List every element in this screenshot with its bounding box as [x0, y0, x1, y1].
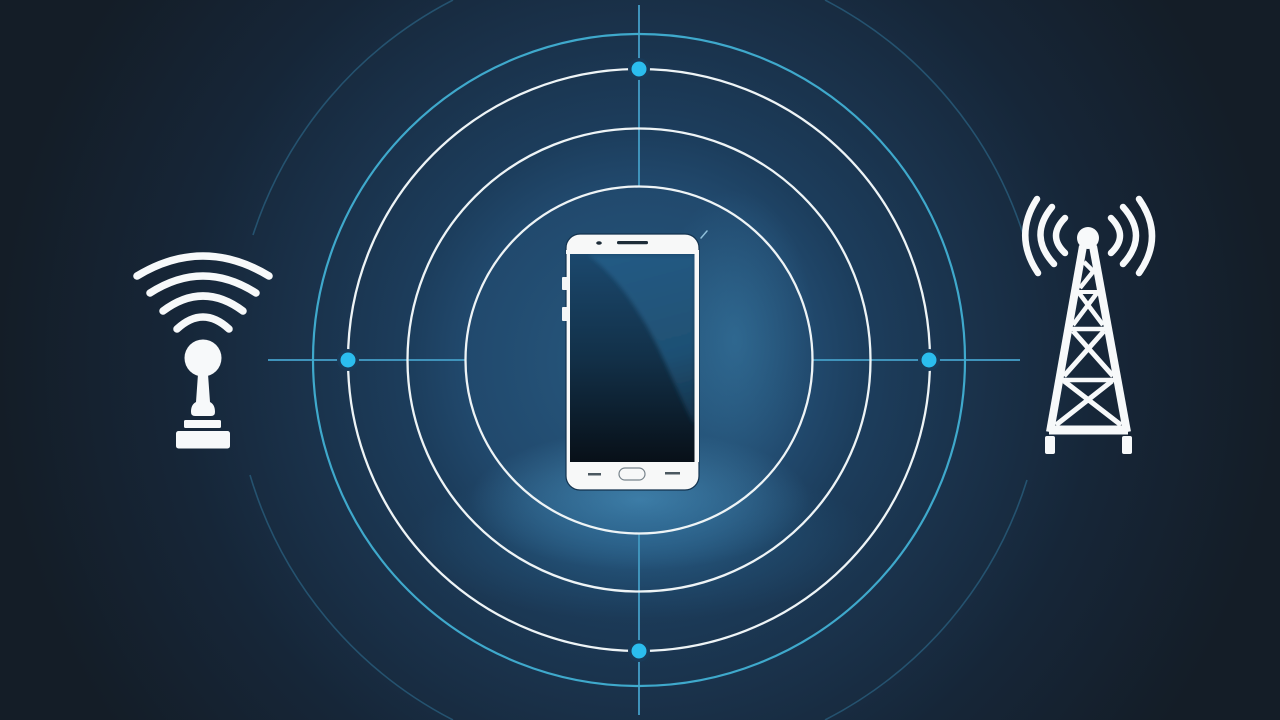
tower ball: [1077, 227, 1099, 249]
wide glow below the inner ring: [400, 460, 880, 630]
home and nav buttons: [588, 468, 680, 480]
tower signal arcs: [1025, 199, 1152, 273]
ring node dots: [337, 58, 940, 662]
screen edge cover: [566, 250, 699, 462]
screen reflection: [588, 255, 694, 425]
icon: wifi antenna: [137, 256, 269, 448]
glow beneath phone: [450, 420, 830, 580]
antenna body: [176, 340, 230, 448]
faint outer ring arcs: [250, 0, 1027, 720]
phone body: [566, 234, 699, 490]
phone screen: [570, 254, 694, 462]
tower feet: [1045, 436, 1132, 454]
icon: cell tower: [1025, 199, 1152, 454]
phone side buttons: [562, 277, 569, 321]
dots: [340, 62, 936, 658]
tower lattice: [1049, 246, 1128, 432]
dot halos: [337, 58, 940, 662]
cyan signal ring: [313, 34, 965, 686]
crosshair axis lines: [268, 5, 1020, 715]
white signal rings: [348, 69, 930, 651]
glow beside phone: [650, 190, 820, 490]
wifi arcs: [137, 256, 269, 329]
small glint: [701, 231, 707, 238]
icon: smartphone: [562, 231, 707, 490]
earpiece and camera: [596, 241, 648, 245]
